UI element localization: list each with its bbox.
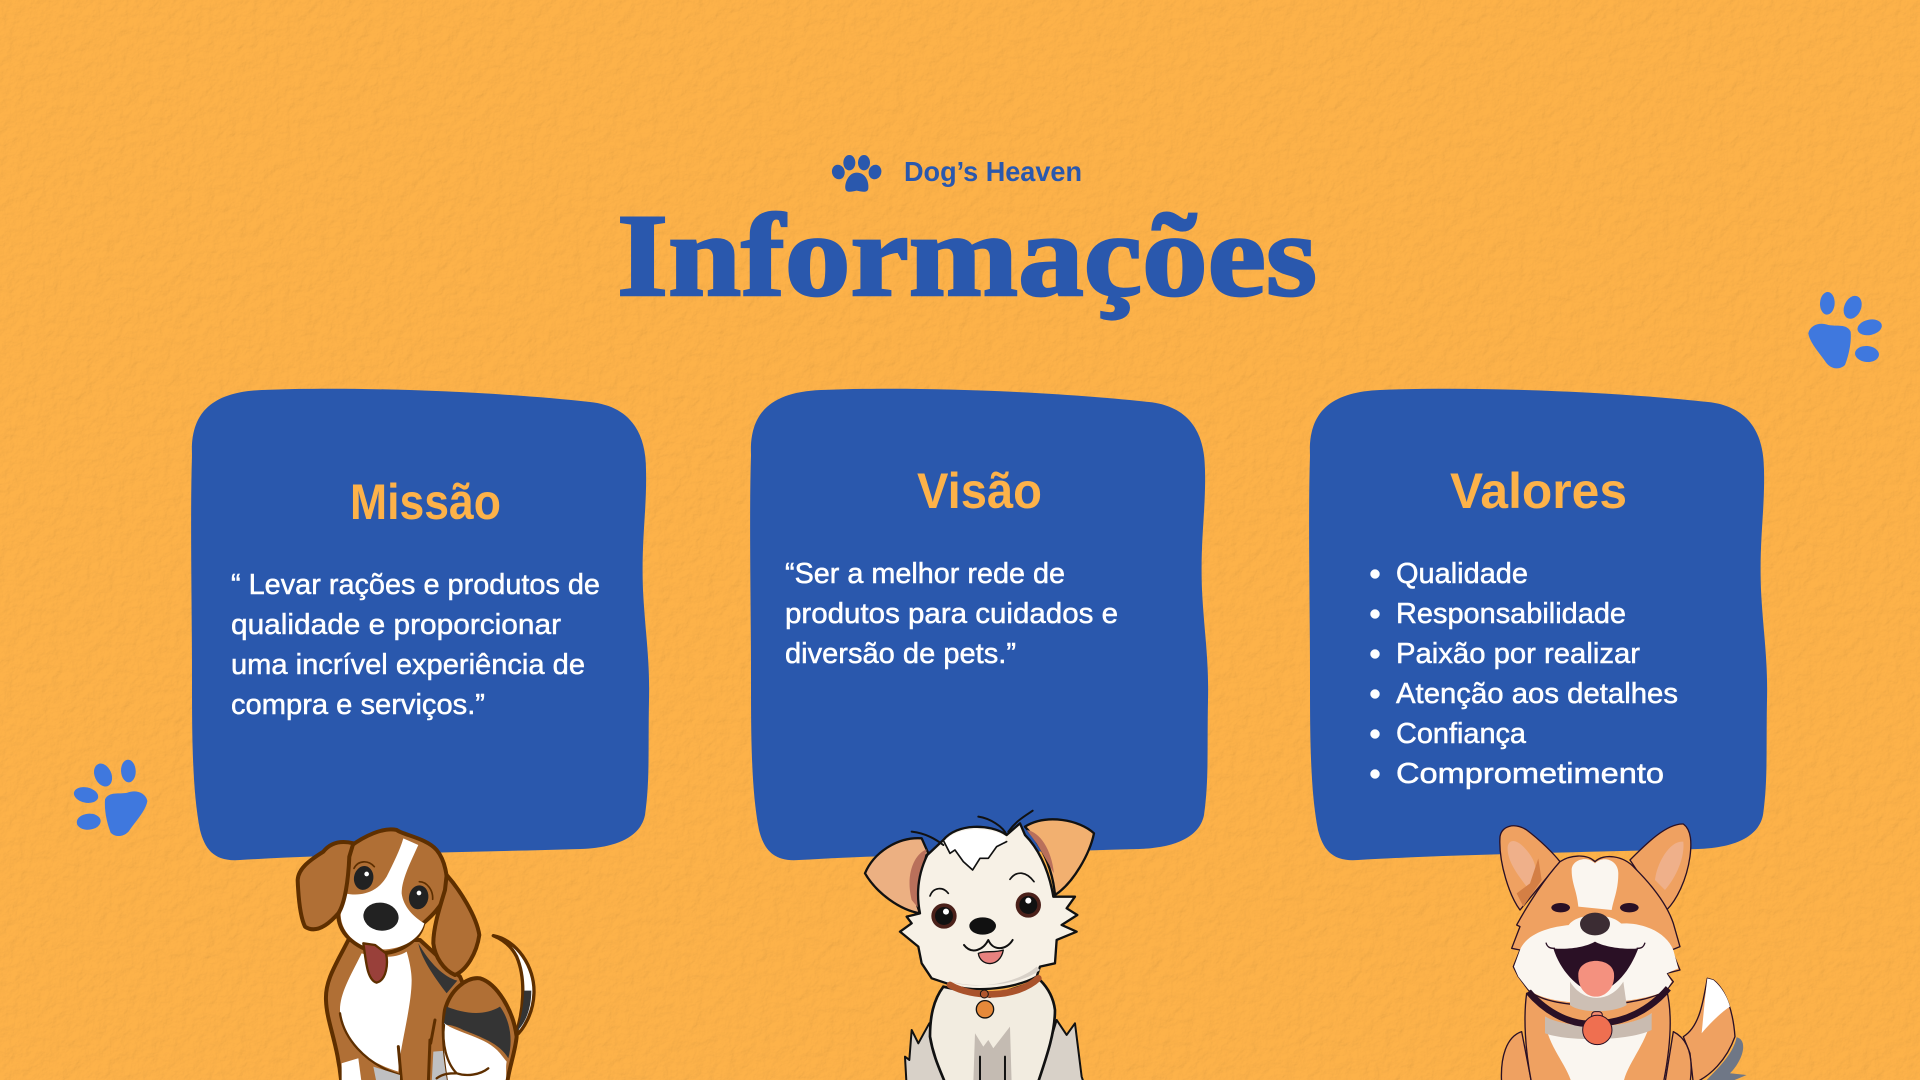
panel: Visão	[750, 389, 1208, 860]
list: company values: Paixão por realizar	[1396, 638, 1640, 670]
list: company values	[1370, 558, 1678, 790]
list: company values: Qualidade	[1396, 558, 1528, 590]
icon: paw top right	[1808, 292, 1883, 368]
logo: paw icon and brand name	[830, 155, 1082, 192]
list: company values: Comprometimento	[1396, 758, 1664, 790]
illustration: corgi puppy	[1500, 824, 1747, 1080]
list: company values: Atenção aos detalhes	[1396, 678, 1678, 710]
text block: mission statement: compra e serviços.”	[231, 689, 485, 721]
text block: mission statement: “ Levar rações e produtos de	[231, 569, 600, 601]
icon: paw bottom left	[72, 759, 147, 836]
illustration: beagle puppy	[298, 829, 534, 1080]
text block: mission statement: uma incrível experiência de	[231, 649, 585, 681]
heading: Visão: Visão	[917, 463, 1042, 519]
heading: Valores: Valores	[1450, 463, 1627, 519]
text block: vision statement	[785, 558, 1118, 670]
icon: logo paw	[830, 155, 883, 192]
text block: vision statement: “Ser a melhor rede de	[785, 558, 1065, 590]
text block: vision statement: produtos para cuidados e	[785, 598, 1118, 630]
list: company values: Responsabilidade	[1396, 598, 1626, 630]
panel: Valores	[1309, 389, 1767, 860]
text block: vision statement: diversão de pets.”	[785, 638, 1016, 670]
heading: Missão: Missão	[350, 474, 501, 530]
list: company values: Confiança	[1396, 718, 1527, 750]
illustration: white terrier puppy	[865, 811, 1094, 1080]
brand name: Dog’s Heaven	[904, 156, 1082, 187]
text block: mission statement	[231, 569, 600, 721]
text block: mission statement: qualidade e proporcionar	[231, 609, 561, 641]
title: Informações	[617, 190, 1317, 321]
panel: Missão	[191, 389, 649, 860]
